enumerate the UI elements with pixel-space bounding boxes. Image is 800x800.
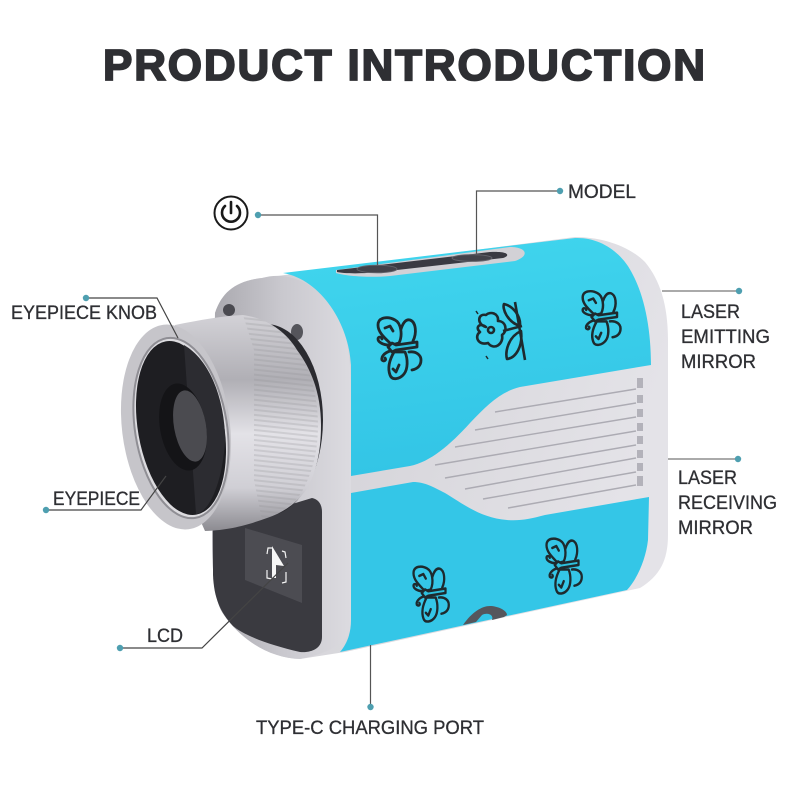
silver body xyxy=(212,237,668,659)
flower icon xyxy=(476,302,525,360)
power button leader xyxy=(255,212,378,265)
inner lens xyxy=(153,380,213,474)
butterfly icon: upper right xyxy=(583,291,621,345)
model leader xyxy=(476,188,563,254)
lower blue panel xyxy=(340,482,649,652)
laser receiving leader xyxy=(668,456,741,462)
butterfly icon: upper left xyxy=(378,318,421,379)
laser emitting mirror label: EMITTING xyxy=(681,326,770,348)
eyepiece knob leader xyxy=(83,295,178,338)
laser receiving mirror label xyxy=(678,467,777,539)
power button xyxy=(357,265,397,273)
eyepiece inner ring xyxy=(121,331,241,525)
display window xyxy=(245,528,302,603)
charging port label: TYPE-C CHARGING PORT xyxy=(256,717,484,739)
LCD leader xyxy=(117,563,288,651)
target reticle with arrow xyxy=(267,546,286,583)
silver pill xyxy=(336,247,525,277)
laser receiving mirror label: LASER xyxy=(678,467,737,489)
eyepiece knob assembly xyxy=(110,304,323,536)
butterfly icon: lower right xyxy=(547,539,582,594)
control panel with buttons xyxy=(336,247,525,277)
dark housing xyxy=(213,498,322,652)
LCD panel xyxy=(213,498,322,652)
upper blue panel xyxy=(283,238,651,476)
laser emitting mirror label: LASER xyxy=(681,301,740,323)
knob cylinder xyxy=(160,315,321,531)
front silver bezel xyxy=(212,276,351,659)
charging port leader xyxy=(367,645,374,710)
power icon xyxy=(214,196,248,230)
mounting flange screw left xyxy=(223,304,235,316)
eyepiece dark glass xyxy=(123,334,239,522)
lens glass xyxy=(168,388,212,464)
eyepiece outer ring xyxy=(110,318,242,536)
laser emitting leader xyxy=(662,288,742,294)
black collar xyxy=(209,324,323,516)
LCD label: LCD xyxy=(147,625,183,647)
mounting flange screw right xyxy=(291,324,303,340)
laser receiving mirror label: RECEIVING xyxy=(678,492,777,514)
laser receiving mirror label: MIRROR xyxy=(678,517,753,539)
laser emitting mirror label: MIRROR xyxy=(681,351,756,373)
eyepiece knob label: EYEPIECE KNOB xyxy=(11,302,157,324)
title: PRODUCT INTRODUCTION xyxy=(103,41,705,90)
eyepiece label: EYEPIECE xyxy=(53,488,140,510)
model button xyxy=(452,255,492,261)
model label: MODEL xyxy=(568,181,636,203)
charging port mark xyxy=(463,606,507,625)
ventilation ribs xyxy=(435,378,643,508)
butterfly icon: lower left xyxy=(414,567,449,622)
glass highlight xyxy=(184,345,225,514)
laser emitting mirror label xyxy=(681,301,770,373)
rangefinder device xyxy=(110,237,668,659)
dark screen strip xyxy=(337,252,507,273)
eyepiece leader xyxy=(43,476,166,513)
knurling xyxy=(243,315,318,520)
